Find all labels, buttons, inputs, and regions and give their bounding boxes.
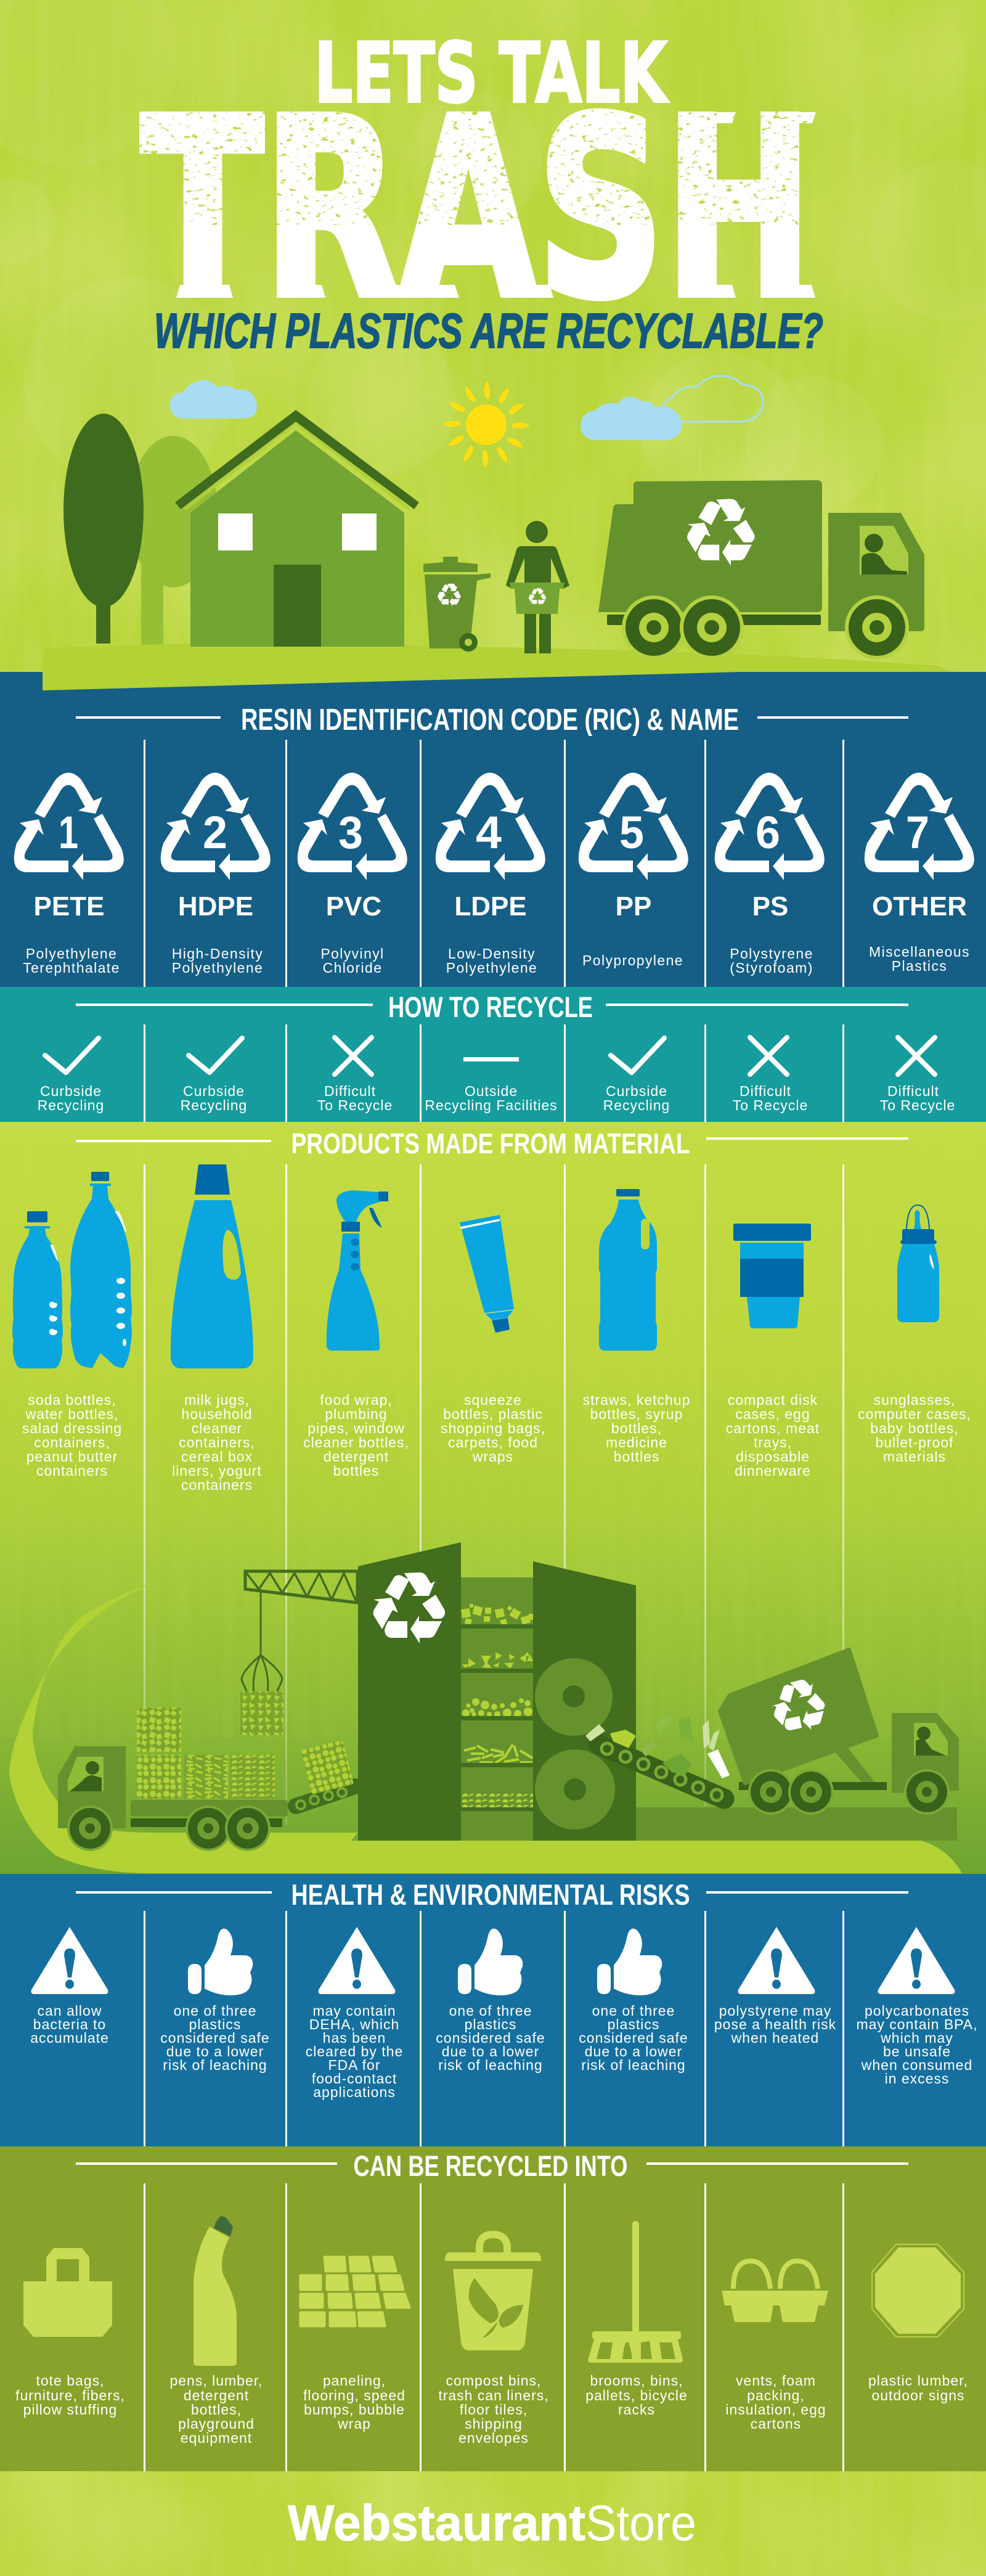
difficult 7: To Recycle: [880, 1097, 955, 1113]
curbside 1: Curbside: [40, 1083, 102, 1099]
RIC 4 LDPE: Low-Density: [448, 946, 536, 962]
icon: disposable cup: [733, 1224, 811, 1328]
bale: hanging: [240, 1691, 283, 1735]
heading: RIC and name: RESIN IDENTIFICATION CODE (RIC) & NAME: [241, 703, 739, 737]
risk 3: [306, 1927, 403, 2100]
text: PP products: bottles, syrup: [590, 1406, 683, 1422]
footer background: [0, 2471, 986, 2576]
RIC 3 PVC: Chloride: [323, 960, 382, 976]
text: HDPE products: liners, yogurt: [172, 1463, 262, 1479]
heading: how to recycle: HOW TO RECYCLE: [388, 991, 593, 1023]
RIC 2 HDPE: HDPE: [178, 891, 253, 922]
curbside 1: Recycling: [38, 1097, 104, 1113]
risk 5: plastics: [608, 2016, 659, 2032]
difficult 3: Difficult: [324, 1083, 376, 1099]
item: compost bin: envelopes: [458, 2430, 529, 2446]
icon: crane: [242, 1571, 357, 1694]
item: compost bin: [438, 2235, 549, 2446]
RIC 4 LDPE: LDPE: [454, 891, 527, 922]
risk 4: plastics: [465, 2016, 516, 2032]
item: egg carton: vents, foam: [736, 2373, 816, 2389]
difficult 7: Difficult: [887, 1083, 939, 1099]
icon: recycling building: [358, 1542, 636, 1841]
RIC 4 LDPE: 4: [476, 807, 502, 858]
item: compost bin: shipping: [465, 2416, 523, 2432]
text: LDPE products: bottles, plastic: [443, 1406, 543, 1422]
curbside 2: Recycling: [181, 1097, 247, 1113]
icon: squeeze tube: [460, 1215, 514, 1333]
text: other products: computer cases,: [858, 1406, 971, 1422]
risk 4: risk of leaching: [438, 2057, 543, 2073]
heading: recycled into: CAN BE RECYCLED INTO: [354, 2149, 627, 2182]
risk 4: due to a lower: [442, 2043, 539, 2059]
risk 4: one of three: [449, 2003, 532, 2019]
icon: recycling bin: [423, 557, 491, 652]
risk 3: applications: [313, 2084, 396, 2100]
item: tote bag: pillow stuffing: [23, 2402, 117, 2418]
text: PETE products: soda bottles,: [28, 1392, 116, 1408]
RIC 3 PVC: PVC: [326, 891, 381, 922]
RIC 1 PETE: PETE: [34, 891, 104, 922]
risk 5: due to a lower: [585, 2043, 682, 2059]
risk 4: considered safe: [436, 2030, 545, 2046]
text: LDPE products: squeeze: [464, 1392, 522, 1408]
RIC 6 PS: Polystyrene: [730, 946, 813, 962]
icon: flatbed truck left: [58, 1707, 288, 1851]
icon: baby bottle: [897, 1205, 939, 1322]
title: Lets Talk: LETS TALK: [314, 25, 669, 121]
text: PETE products: containers: [36, 1463, 108, 1479]
text: other products: materials: [883, 1449, 946, 1465]
text: PETE products: peanut butter: [26, 1449, 118, 1465]
item: floor tiles: flooring, speed: [303, 2387, 405, 2403]
risk 6: polystyrene may: [719, 2003, 831, 2019]
icon: milk jug: [171, 1164, 253, 1368]
text: LDPE products: shopping bags,: [441, 1420, 545, 1436]
panel: resin identification code: [0, 672, 986, 987]
text: PS products: cartons, meat: [726, 1420, 820, 1436]
column dividers: [144, 1164, 844, 1825]
bale: tilted: [301, 1740, 354, 1794]
item: broom: [585, 2221, 688, 2418]
column dividers: [144, 740, 844, 987]
RIC 3 PVC: [298, 773, 407, 976]
risk 2: considered safe: [160, 2030, 270, 2046]
RIC 1 PETE: [14, 773, 124, 976]
risk 7: in excess: [885, 2071, 949, 2087]
icon: soda bottle and water bottle: [12, 1172, 132, 1368]
text: HDPE products: cereal box: [181, 1449, 253, 1465]
risk 3: DEHA, which: [309, 2016, 399, 2032]
risk 3: FDA for: [328, 2057, 380, 2073]
risk 7: which may: [880, 2030, 953, 2046]
column dividers: [144, 2183, 844, 2471]
icon: cloud left: [170, 380, 257, 419]
item: compost bin: compost bins,: [446, 2373, 541, 2389]
panel: products made from material: [0, 1122, 986, 1877]
RIC 2 HDPE: [161, 773, 271, 976]
difficult 3: To Recycle: [317, 1097, 393, 1113]
text: HDPE products: containers: [181, 1477, 253, 1493]
RIC 6 PS: 6: [756, 807, 780, 858]
risk 6: [714, 1927, 836, 2046]
RIC 3 PVC: 3: [338, 807, 363, 858]
item: egg carton: [722, 2261, 828, 2432]
RIC 4 LDPE: Polyethylene: [446, 960, 537, 976]
risk 2: risk of leaching: [163, 2057, 267, 2073]
curbside 5: Recycling: [603, 1097, 670, 1113]
item: floor tiles: wrap: [337, 2416, 371, 2432]
RIC 5 PP: Polypropylene: [582, 952, 683, 968]
outside recycling facilities 4: [425, 1057, 558, 1113]
heading: how to recycle: [76, 991, 908, 1023]
heading: risks: HEALTH & ENVIRONMENTAL RISKS: [291, 1878, 690, 1911]
text: PETE products: water bottles,: [25, 1406, 118, 1422]
RIC 2 HDPE: 2: [203, 807, 227, 858]
big conveyor: [599, 1743, 724, 1801]
risk 5: [579, 1929, 688, 2073]
item: compost bin: floor tiles,: [460, 2402, 528, 2418]
RIC 6 PS: [715, 773, 825, 976]
risk 5: considered safe: [579, 2030, 688, 2046]
RIC 1 PETE: Terephthalate: [23, 960, 120, 976]
heading: recycled into: [76, 2149, 908, 2182]
item: floor tiles: paneling,: [323, 2373, 386, 2389]
RIC 1 PETE: Polyethylene: [26, 946, 117, 962]
risk 7: be unsafe: [883, 2043, 951, 2059]
text: HDPE products: household: [181, 1406, 253, 1422]
illustration: neighbourhood scene: [43, 376, 961, 690]
text: PVC products: cleaner bottles,: [303, 1434, 409, 1450]
risk 2: [160, 1929, 270, 2073]
item: detergent bottle: playground: [178, 2416, 255, 2432]
RIC 7 OTHER: Plastics: [892, 958, 947, 974]
panel: how to recycle: [0, 987, 986, 1122]
RIC 7 OTHER: Miscellaneous: [869, 944, 970, 960]
RIC 2 HDPE: Polyethylene: [172, 960, 263, 976]
RIC 7 OTHER: [865, 773, 974, 974]
risk 7: polycarbonates: [865, 2003, 969, 2019]
icon: clouds right: [581, 376, 763, 440]
risk 3: food-contact: [312, 2071, 397, 2087]
text: PETE products: containers,: [34, 1434, 110, 1450]
item: detergent bottle: detergent: [184, 2387, 249, 2403]
text: PS products: trays,: [754, 1434, 792, 1450]
curbside 5: [603, 1038, 670, 1113]
text: HDPE products: cleaner: [192, 1420, 242, 1436]
RIC 6 PS: (Styrofoam): [730, 960, 813, 976]
heading: risks: [76, 1878, 908, 1911]
item: egg carton: packing,: [747, 2387, 805, 2403]
difficult 6: [733, 1037, 808, 1113]
text: PVC products: bottles: [333, 1463, 379, 1479]
item: tote bag: tote bags,: [36, 2373, 105, 2389]
text: LDPE products: carpets, food: [448, 1434, 538, 1450]
RIC 2 HDPE: High-Density: [172, 946, 263, 962]
RIC 5 PP: PP: [616, 891, 651, 922]
text: PS products: disposable: [736, 1449, 810, 1465]
curbside 2: Curbside: [183, 1083, 245, 1099]
RIC 4 LDPE: [436, 773, 545, 976]
text: LDPE products: wraps: [472, 1449, 513, 1465]
risk 5: one of three: [592, 2003, 675, 2019]
falling trash: [585, 1714, 730, 1778]
item: tote bag: furniture, fibers,: [15, 2387, 125, 2403]
item: detergent bottle: [169, 2216, 263, 2446]
icon: garbage truck: [598, 480, 924, 660]
text: PS products: compact disk: [728, 1392, 818, 1408]
decorative leaf at top edge: [616, 0, 650, 29]
column dividers: [144, 1024, 844, 1122]
risk 1: accumulate: [30, 2030, 109, 2046]
risk 3: has been: [323, 2030, 386, 2046]
RIC 7 OTHER: 7: [906, 807, 929, 858]
heading: products: PRODUCTS MADE FROM MATERIAL: [291, 1127, 690, 1159]
item: egg carton: cartons: [751, 2416, 801, 2432]
item: detergent bottle: pens, lumber,: [169, 2373, 263, 2389]
icon: house: [175, 410, 419, 647]
outside recycling facilities 4: Recycling Facilities: [425, 1097, 558, 1113]
panel: can be recycled into: [0, 2146, 986, 2471]
icon: ketchup bottle: [599, 1189, 657, 1351]
item: egg carton: insulation, egg: [725, 2402, 826, 2418]
panel: health and environmental risks: [0, 1874, 986, 2146]
difficult 6: To Recycle: [733, 1097, 808, 1113]
item: detergent bottle: bottles,: [191, 2402, 242, 2418]
icon: dark tree: [63, 414, 144, 644]
difficult 7: [880, 1037, 955, 1113]
item: broom: racks: [618, 2402, 655, 2418]
item: detergent bottle: equipment: [181, 2430, 252, 2446]
text: PS products: cases, egg: [735, 1406, 810, 1422]
text: PETE products: salad dressing: [22, 1420, 122, 1436]
risk 4: [436, 1929, 545, 2073]
risk 6: pose a health risk: [714, 2016, 836, 2032]
risk 3: cleared by the: [306, 2043, 403, 2059]
text: HDPE products: milk jugs,: [184, 1392, 250, 1408]
item: octagonal sign: plastic lumber,: [868, 2373, 968, 2389]
text: PP products: bottles: [614, 1449, 659, 1465]
item: octagonal sign: outdoor signs: [871, 2387, 965, 2403]
risk 7: may contain BPA,: [856, 2016, 978, 2032]
risk 7: [856, 1927, 978, 2087]
risk 6: when heated: [731, 2030, 819, 2046]
ground hill: [43, 644, 961, 690]
risk 1: [30, 1927, 109, 2046]
risk 3: may contain: [312, 2003, 396, 2019]
text: PS products: dinnerware: [735, 1463, 811, 1479]
item: octagonal sign: [868, 2244, 968, 2403]
icon: light tree: [129, 436, 218, 645]
risk 2: one of three: [174, 2003, 256, 2019]
heading: products: [76, 1127, 908, 1159]
icon: dump truck right: [720, 1650, 959, 1815]
logo: WebstaurantStore: Store: [585, 2495, 696, 2551]
outside recycling facilities 4: Outside: [465, 1083, 518, 1099]
illustration: recycling facility: [9, 1542, 962, 1873]
risk 2: due to a lower: [166, 2043, 264, 2059]
difficult 6: Difficult: [740, 1083, 791, 1099]
item: compost bin: trash can liners,: [438, 2387, 549, 2403]
text: PP products: medicine: [606, 1434, 667, 1450]
curbside 1: [38, 1038, 104, 1113]
item: floor tiles: bumps, bubble: [304, 2402, 405, 2418]
RIC 6 PS: PS: [752, 891, 788, 922]
text: PVC products: pipes, window: [308, 1420, 405, 1436]
text: HDPE products: containers,: [179, 1434, 255, 1450]
text: other products: baby bottles,: [870, 1420, 959, 1436]
item: broom: brooms, bins,: [590, 2373, 683, 2389]
rollers: [535, 1658, 615, 1830]
RIC 3 PVC: Polyvinyl: [320, 946, 385, 962]
curbside 5: Curbside: [606, 1083, 667, 1099]
small conveyor: [296, 1786, 355, 1809]
road swoosh: [9, 1583, 962, 1873]
difficult 3: [317, 1037, 393, 1113]
text: PVC products: food wrap,: [320, 1392, 393, 1408]
risk 7: when consumed: [861, 2057, 972, 2073]
item: floor tiles: [301, 2257, 409, 2432]
icon: spray bottle: [327, 1190, 388, 1351]
text: PVC products: detergent: [324, 1449, 389, 1465]
text: PP products: straws, ketchup: [583, 1392, 690, 1408]
column dividers: [144, 1911, 844, 2146]
item: tote bag: [15, 2248, 125, 2418]
RIC 5 PP: [579, 773, 688, 968]
curbside 2: [181, 1038, 247, 1113]
text: PP products: bottles,: [611, 1420, 662, 1436]
risk 1: bacteria to: [33, 2016, 106, 2032]
background: lime paper texture top: [0, 0, 986, 675]
logo: WebstaurantStore: Webstaurant: [288, 2495, 585, 2551]
shelves: [461, 1624, 533, 1811]
RIC 5 PP: 5: [619, 807, 644, 858]
RIC 1 PETE: 1: [59, 807, 78, 858]
text: other products: bullet-proof: [875, 1434, 954, 1450]
item: broom: pallets, bicycle: [585, 2387, 688, 2403]
icon: person with basket: [506, 521, 569, 653]
risk 2: plastics: [189, 2016, 241, 2032]
RIC 7 OTHER: OTHER: [872, 891, 967, 922]
icon: sun: [442, 381, 530, 468]
shelf piles: [461, 1604, 533, 1807]
risk 1: can allow: [38, 2003, 102, 2019]
text: other products: sunglasses,: [874, 1392, 955, 1408]
text: PVC products: plumbing: [325, 1406, 388, 1422]
risk 5: risk of leaching: [581, 2057, 686, 2073]
platform: [636, 1807, 957, 1841]
